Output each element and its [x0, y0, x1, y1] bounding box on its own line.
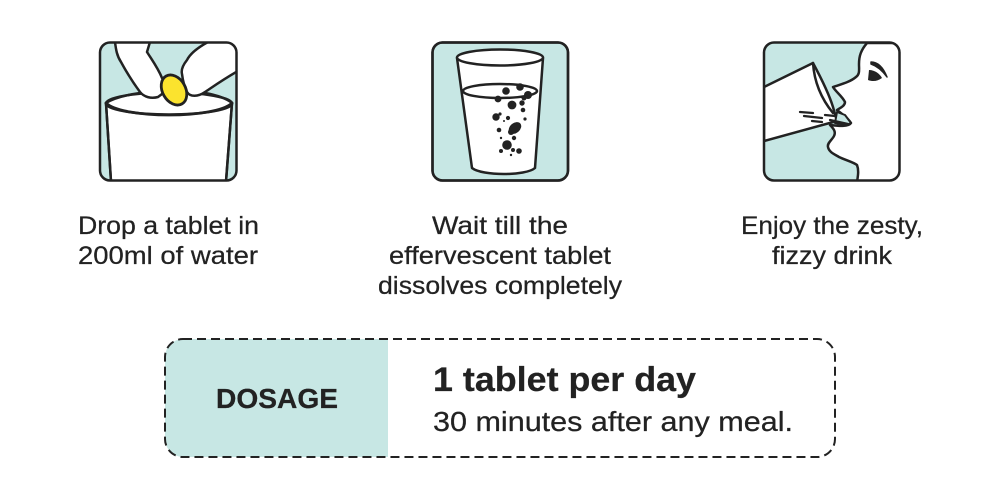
caption: step 1	[78, 212, 259, 270]
dashed border	[165, 339, 835, 457]
icon: person drinking	[764, 42, 900, 182]
caption: step 3: fizzy drink	[772, 242, 893, 270]
caption: step 1: 200ml of water	[78, 242, 258, 270]
panel: dosage	[165, 339, 835, 457]
icon: tablet dissolving in glass	[432, 42, 568, 180]
dosage label background	[165, 339, 388, 457]
dosage amount: 1 tablet per day	[433, 361, 696, 399]
icon: drop tablet into glass	[100, 42, 238, 182]
caption: step 2: effervescent tablet	[389, 242, 611, 270]
dosage timing: 30 minutes after any meal.	[433, 406, 793, 437]
bubbles	[492, 83, 532, 156]
caption: step 2	[378, 212, 623, 300]
dosage label: DOSAGE	[216, 383, 338, 414]
caption: step 3: Enjoy the zesty,	[741, 212, 923, 240]
eye	[871, 62, 887, 77]
caption: step 3	[741, 212, 923, 270]
caption: step 2: dissolves completely	[378, 272, 623, 300]
caption: step 1: Drop a tablet in	[78, 212, 259, 240]
caption: step 2: Wait till the	[432, 212, 568, 240]
